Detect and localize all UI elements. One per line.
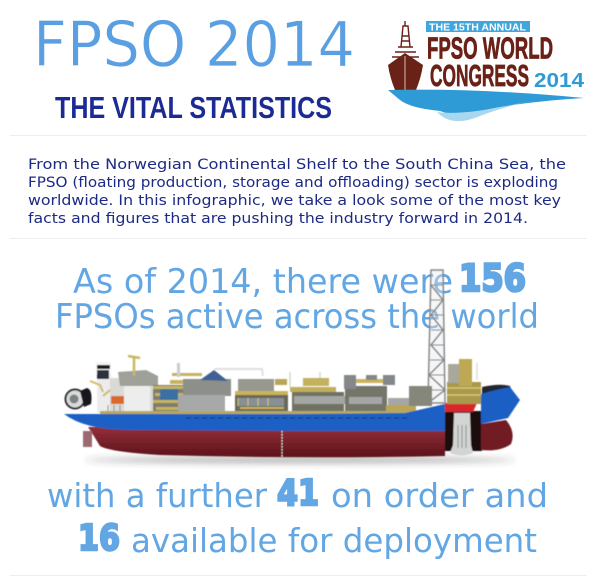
aft accommodation block xyxy=(97,373,111,413)
flare tower xyxy=(428,270,445,403)
logo: FPSO World Congress 2014 xyxy=(388,21,585,121)
hull red xyxy=(88,427,445,457)
subtitle: The Vital Statistics: THE VITAL STATISTICS xyxy=(55,90,332,125)
illustration: FPSO ship xyxy=(64,270,520,463)
forward structures xyxy=(447,382,481,404)
aft yellow tower xyxy=(153,363,202,412)
headline: 156 FPSOs active: As of 2014, there were xyxy=(73,262,453,302)
ship shadow xyxy=(85,457,515,463)
logo year: 2014 xyxy=(534,70,585,92)
logo ship icon xyxy=(388,21,423,90)
headline: 41 on order, 16 available: 41 xyxy=(277,473,319,514)
hull draft marks xyxy=(281,431,283,457)
turret red deck xyxy=(445,403,477,412)
headline: 41 on order, 16 available: available for deployment xyxy=(131,521,537,560)
turret section xyxy=(445,411,482,451)
logo banner xyxy=(426,21,530,32)
intro text block xyxy=(28,157,566,227)
rudder xyxy=(83,431,92,447)
intro text block: worldwide. In this infographic, we take a look some of the most key xyxy=(28,193,562,209)
intro text block: facts and figures that are pushing the industry forward in 2014. xyxy=(28,211,528,227)
headline: 41 on order, 16 available: with a further xyxy=(47,476,267,515)
bow red xyxy=(481,420,513,450)
intro text block: FPSO (floating production, storage and offloading) sector is exploding xyxy=(28,175,558,191)
headline: 156 FPSOs active: FPSOs active across the world xyxy=(55,297,539,337)
deck line xyxy=(100,411,445,414)
bow ring xyxy=(482,385,512,396)
hull blue xyxy=(64,404,445,431)
divider xyxy=(10,135,587,136)
process modules and cranes xyxy=(183,379,231,396)
title: FPSO 2014: FPSO 2014 xyxy=(33,8,355,81)
headline: 156 FPSOs active: 156 xyxy=(459,257,526,300)
turret column xyxy=(450,413,473,456)
headline: 156 FPSOs active xyxy=(55,257,539,337)
logo wave xyxy=(388,90,584,114)
headline: 41 on order, 16 available xyxy=(47,473,548,560)
logo: FPSO World Congress 2014: THE 15TH ANNUAL xyxy=(429,22,526,34)
stern rotor xyxy=(66,390,84,408)
headline: 41 on order, 16 available: on order and xyxy=(331,476,548,515)
headline: 41 on order, 16 available: 16 xyxy=(78,518,120,559)
bow blue xyxy=(481,387,520,424)
intro text block: From the Norwegian Continental Shelf to the South China Sea, the xyxy=(28,157,566,173)
